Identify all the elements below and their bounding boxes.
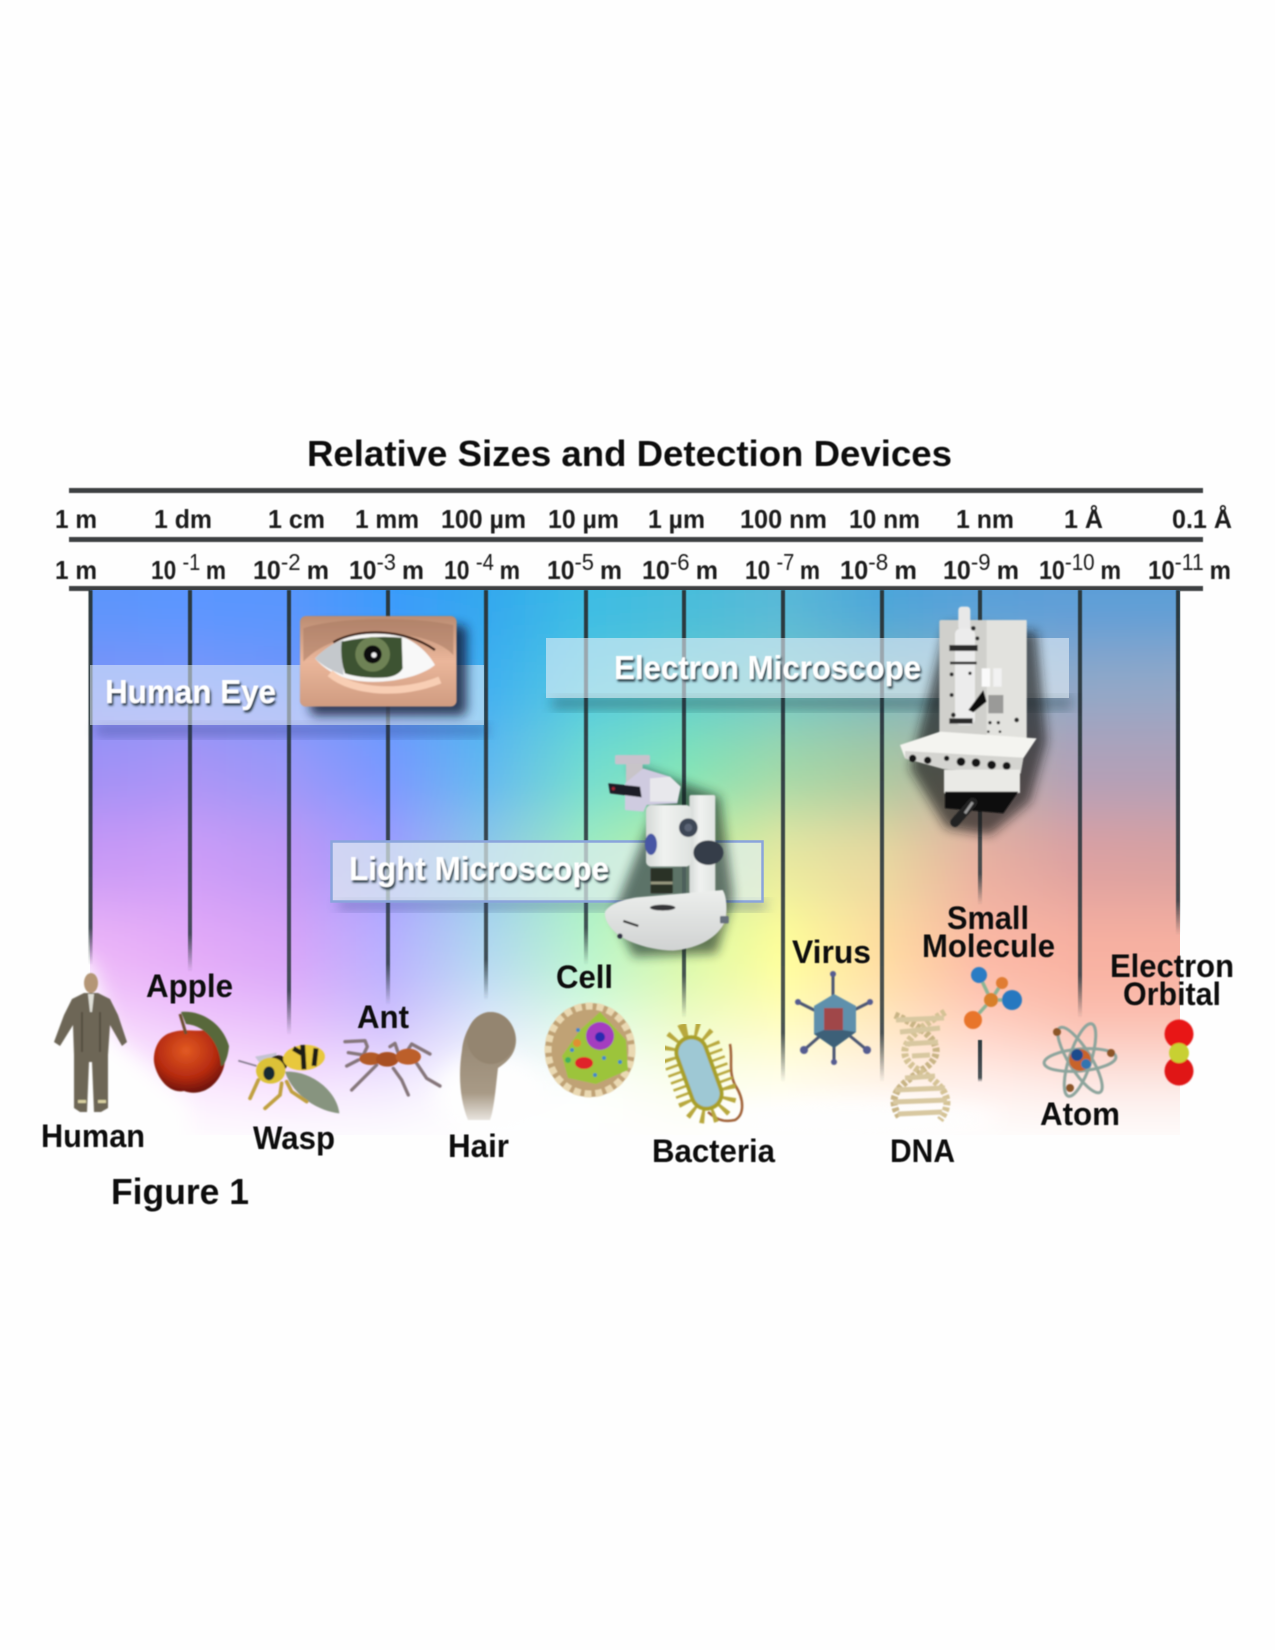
caption: figure 1: Figure 1	[111, 1171, 249, 1212]
scale tick lines	[88, 590, 1180, 1082]
label: virus: Virus	[792, 934, 871, 970]
scale row: powers of ten: -4	[476, 549, 500, 575]
scale row: powers of ten: 10	[444, 555, 473, 585]
scale row: powers of ten: 10	[943, 555, 972, 585]
icon: hair strand	[460, 1012, 516, 1120]
header rules	[69, 488, 1203, 591]
figure: relative sizes and detection devices	[42, 438, 1233, 1212]
label: small molecule	[922, 900, 1055, 964]
scale row: powers of ten: 10	[547, 555, 576, 585]
label: electron microscope: Electron Microscope	[614, 649, 921, 686]
scale row: powers of ten: m	[402, 555, 424, 585]
icon: virus	[795, 971, 873, 1065]
scale row: powers of ten: -9	[971, 549, 997, 575]
scale row: powers of ten: m	[696, 555, 718, 585]
scale row: metric units: 100 µm	[441, 504, 526, 534]
scale row: powers of ten: m	[800, 555, 820, 585]
label: wasp: Wasp	[253, 1120, 335, 1156]
scale row: powers of ten: m	[1100, 555, 1121, 585]
scale row: powers of ten: 10	[1148, 555, 1177, 585]
icon: human figure	[54, 973, 127, 1112]
scale row: powers of ten: 10	[151, 555, 180, 585]
scale row: powers of ten: -2	[281, 549, 307, 575]
icon: ant	[345, 1041, 440, 1095]
panel: light microscope band	[332, 842, 766, 910]
scale row: powers of ten: 10	[349, 555, 378, 585]
scale row: metric units: 10 nm	[849, 504, 920, 534]
icon: cell	[545, 1003, 635, 1097]
icon: light microscope	[605, 755, 733, 957]
icon: electron microscope	[900, 607, 1047, 835]
label: bacteria: Bacteria	[652, 1133, 775, 1169]
scale row: powers of ten: 10	[253, 555, 282, 585]
scale row: powers of ten: -5	[574, 549, 600, 575]
scale row: metric units: 1 mm	[355, 504, 419, 534]
label: hair: Hair	[448, 1128, 509, 1164]
icon: apple	[154, 1012, 229, 1093]
label: electron orbital: Electron	[1110, 948, 1234, 984]
scale row: powers of ten: 10	[840, 555, 869, 585]
icon: dna helix	[893, 1012, 947, 1120]
scale row: powers of ten: 1 m	[55, 555, 97, 585]
scale row: metric units: 0.1 Å	[1172, 504, 1232, 534]
title: Relative Sizes and Detection Devices	[307, 433, 952, 474]
label: cell: Cell	[556, 959, 613, 995]
scale row: powers of ten: m	[1210, 555, 1231, 585]
scale row: powers of ten: 10	[745, 555, 774, 585]
panel: electron microscope band	[546, 638, 1072, 709]
scale row: powers of ten: m	[894, 555, 917, 585]
label: ant: Ant	[357, 999, 409, 1035]
label: dna: DNA	[890, 1133, 955, 1169]
scale row: powers of ten: -7	[776, 549, 800, 575]
scale row: metric units: 100 nm	[740, 504, 827, 534]
scale row: metric units: 1 cm	[268, 504, 325, 534]
scale row: powers of ten: -6	[670, 549, 696, 575]
label: atom: Atom	[1040, 1096, 1120, 1132]
scale row: powers of ten: m	[500, 555, 520, 585]
scale row: powers of ten	[55, 549, 1231, 585]
label: apple: Apple	[146, 968, 233, 1004]
scale row: powers of ten: 10	[642, 555, 671, 585]
label: small molecule: Molecule	[922, 928, 1055, 964]
label: human eye: Human Eye	[105, 673, 276, 710]
icon: electron orbital	[1164, 1020, 1194, 1086]
label: human: Human	[41, 1118, 145, 1154]
scale row: metric units	[55, 504, 1232, 534]
scale row: powers of ten: m	[997, 555, 1019, 585]
scale row: metric units: 1 nm	[956, 504, 1014, 534]
scale row: metric units: 10 µm	[548, 504, 619, 534]
icon: bacteria	[672, 1033, 742, 1121]
label: light microscope: Light Microscope	[349, 850, 609, 887]
spectrum background panel	[90, 590, 1180, 1124]
scale row: powers of ten: -3	[376, 549, 402, 575]
icon: small molecule	[964, 967, 1022, 1029]
scale row: powers of ten: -1	[182, 549, 206, 575]
scale row: powers of ten: 10	[1039, 555, 1068, 585]
scale row: metric units: 1 m	[55, 504, 97, 534]
scale row: powers of ten: -11	[1175, 549, 1210, 575]
label: small molecule: Small	[947, 900, 1029, 936]
panel: human eye band	[90, 665, 488, 736]
scale row: metric units: 1 Å	[1064, 504, 1103, 534]
label: electron orbital: Orbital	[1123, 976, 1221, 1012]
scale row: metric units: 1 µm	[648, 504, 705, 534]
scale row: powers of ten: m	[600, 555, 622, 585]
scale row: powers of ten: -10	[1065, 549, 1100, 575]
label: electron orbital	[1110, 948, 1234, 1012]
scale row: powers of ten: m	[307, 555, 329, 585]
scale row: metric units: 1 dm	[154, 504, 212, 534]
scale row: powers of ten: -8	[868, 549, 894, 575]
icon: human eye	[300, 616, 467, 716]
icon: atom	[1043, 1020, 1117, 1100]
scale row: powers of ten: m	[206, 555, 226, 585]
icon: wasp	[238, 1043, 339, 1113]
